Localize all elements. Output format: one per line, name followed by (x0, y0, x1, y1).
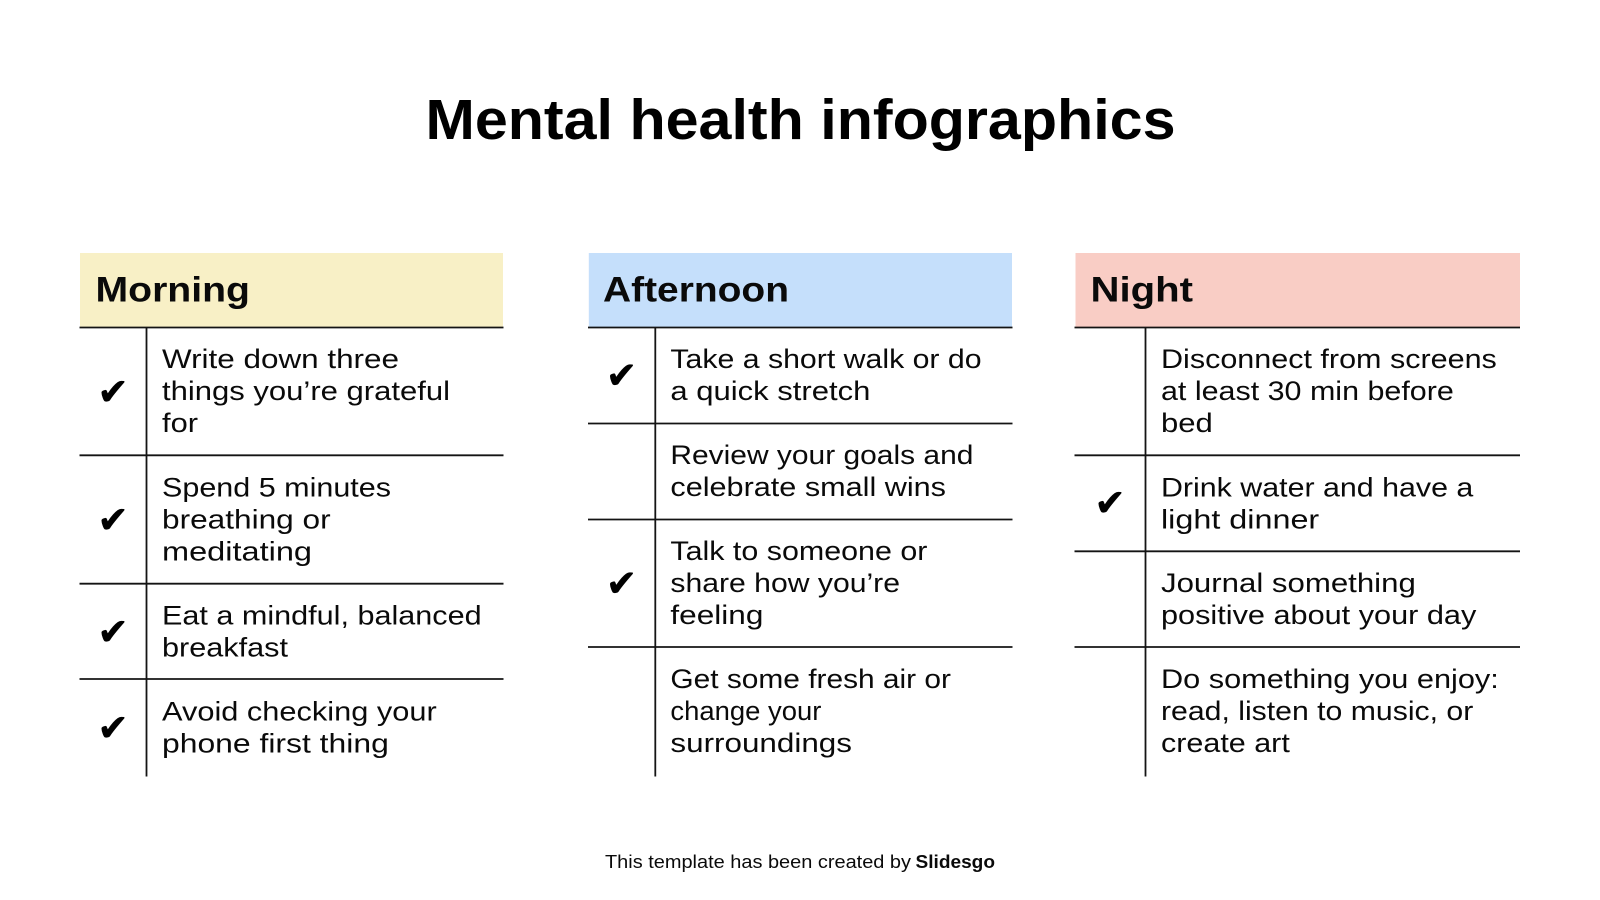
row: breathing (97, 472, 391, 566)
text: screens (1161, 344, 1497, 438)
row: gratitude (97, 344, 450, 438)
title: Mental health infographics (426, 88, 1176, 151)
text: enjoy: create art (1161, 728, 1290, 758)
text: breathing (162, 472, 391, 566)
text: water: Drink water and have a (1161, 472, 1473, 502)
text: goals: celebrate small wins (670, 472, 946, 502)
row: phone (97, 697, 437, 759)
text: breathing: Spend 5 minutes (162, 472, 391, 502)
text: water (1161, 472, 1473, 534)
text: enjoy: Do something you enjoy: (1161, 664, 1499, 694)
text: walk: a quick stretch (670, 376, 870, 406)
text: water: light dinner (1161, 504, 1319, 534)
text: breakfast: Eat a mindful, balanced (162, 600, 482, 630)
row: journal (1161, 568, 1477, 630)
panel: morning (80, 253, 504, 776)
row: water (1094, 472, 1473, 534)
footer credit: Slidesgo (916, 851, 995, 872)
text: phone: Avoid checking your (162, 697, 437, 727)
text: fresh air (670, 664, 951, 758)
text: phone (162, 697, 437, 759)
icon: check: ✔ (97, 610, 129, 654)
icon: check: ✔ (97, 370, 129, 414)
icon: check: ✔ (97, 498, 129, 542)
text: screens: bed (1161, 408, 1213, 438)
row: enjoy (1161, 664, 1499, 758)
heading: night: Night (1090, 271, 1193, 310)
footer credit: This template has been created by (605, 851, 912, 872)
text: breathing: breathing or (162, 504, 331, 534)
icon: check: ✔ (1094, 482, 1126, 524)
text: journal (1161, 568, 1477, 630)
text: phone: phone first thing (162, 729, 389, 759)
heading: afternoon (589, 253, 1012, 327)
panel: night (1074, 253, 1520, 776)
text: breakfast (162, 600, 482, 662)
row: goals (670, 440, 973, 502)
text: goals (670, 440, 973, 502)
panel: afternoon (588, 253, 1012, 776)
heading: morning: Morning (96, 271, 250, 310)
text: talk (670, 536, 928, 630)
row: fresh air (670, 664, 951, 758)
text: journal: positive about your day (1161, 600, 1477, 630)
heading: morning (80, 253, 503, 327)
heading: afternoon: Afternoon (603, 271, 789, 310)
heading: night (1076, 253, 1520, 327)
text: gratitude: things you’re grateful (162, 376, 450, 406)
text: enjoy: read, listen to music, or (1161, 696, 1473, 726)
text: walk (670, 344, 982, 406)
text: talk: Talk to someone or (670, 536, 928, 566)
text: breathing: meditating (162, 536, 312, 566)
text: gratitude: Write down three (162, 344, 399, 374)
icon: check: ✔ (606, 354, 637, 397)
text: gratitude: for (162, 408, 198, 438)
text: breakfast: breakfast (162, 632, 289, 662)
text: fresh air: change your (670, 696, 822, 726)
text: goals: Review your goals and (670, 440, 973, 470)
text: gratitude (162, 344, 450, 438)
row: screens (1161, 344, 1497, 438)
text: fresh air: Get some fresh air or (670, 664, 951, 694)
row: breakfast (97, 600, 482, 662)
icon: check: ✔ (97, 706, 129, 750)
text: journal: Journal something (1161, 568, 1416, 598)
icon: check: ✔ (606, 562, 637, 605)
text: walk: Take a short walk or do (670, 344, 982, 374)
text: screens: at least 30 min before (1161, 376, 1454, 406)
text: enjoy (1161, 664, 1499, 758)
text: talk: feeling (670, 600, 763, 630)
row: walk (606, 344, 982, 406)
text: talk: share how you’re (670, 568, 900, 598)
text: screens: Disconnect from screens (1161, 344, 1497, 374)
text: fresh air: surroundings (670, 728, 852, 758)
row: talk (606, 536, 928, 630)
